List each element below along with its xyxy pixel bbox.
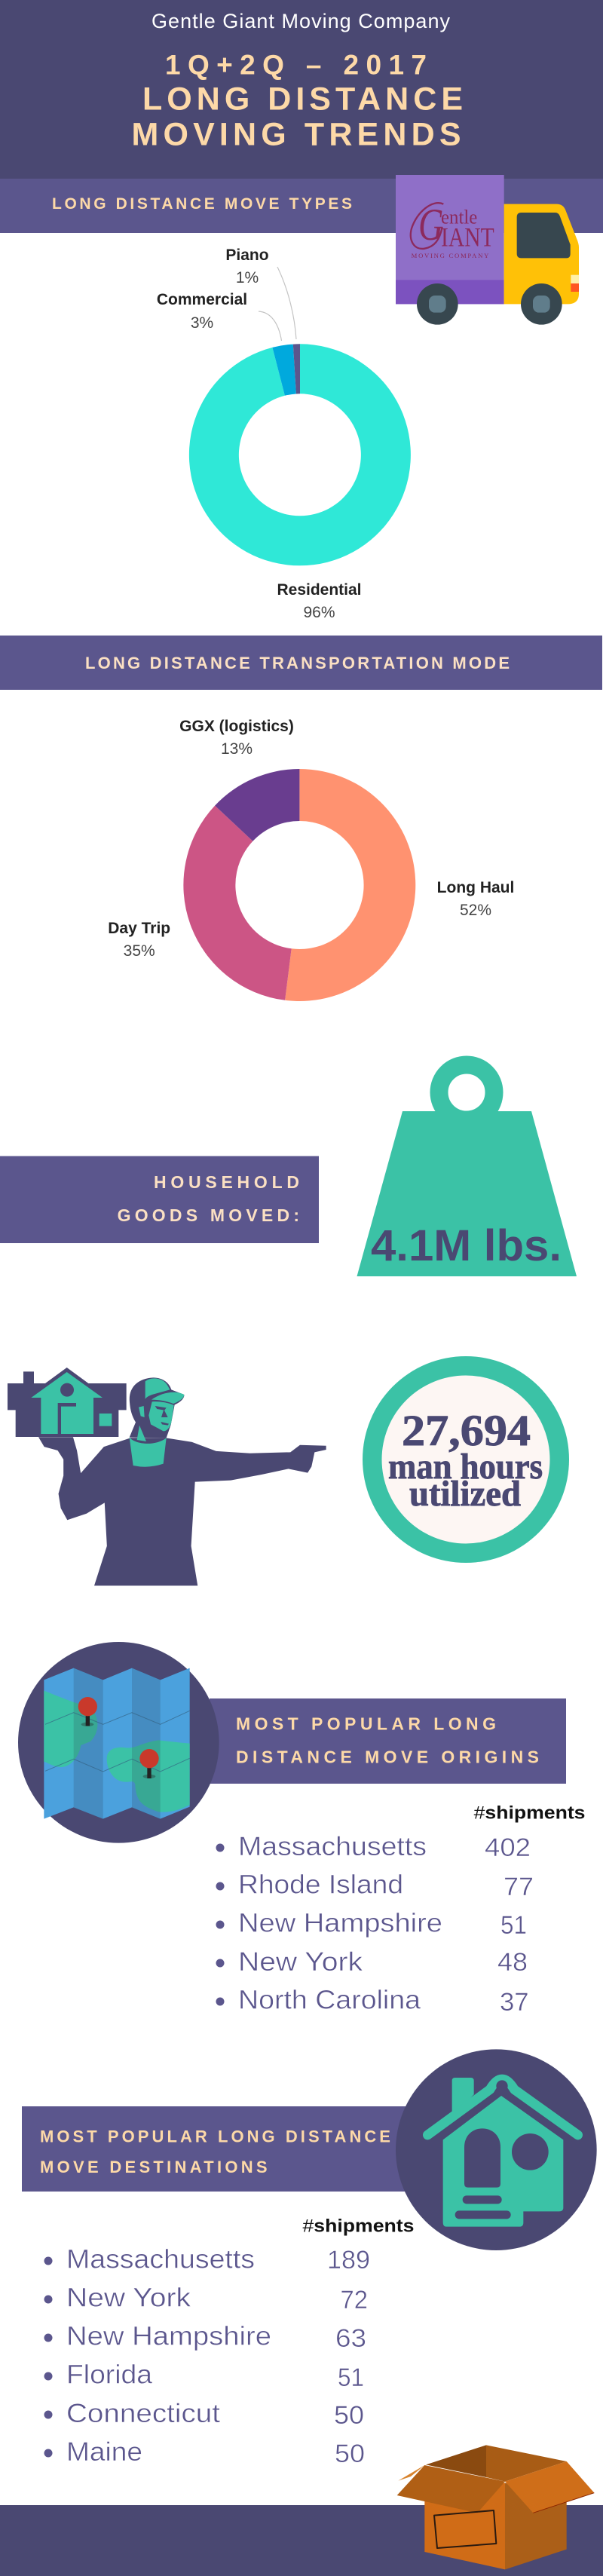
list: origins: 77 <box>504 1873 534 1901</box>
heading: household goods: GOODS MOVED: <box>118 1205 299 1225</box>
list: destinations: New York <box>66 2283 191 2313</box>
section band: long distance move types <box>0 179 603 233</box>
donut chart: move types <box>189 344 411 565</box>
list: destinations: 50 <box>334 2401 364 2430</box>
logo text: G <box>418 200 443 250</box>
heading text: origins <box>236 1714 539 1767</box>
icon: house in circle <box>396 2049 597 2250</box>
title: MOVING TRENDS <box>131 116 461 152</box>
icon: folded map <box>18 1642 219 1843</box>
label: long haul: Long Haul <box>437 879 514 896</box>
man upper details and house <box>8 1368 184 1467</box>
heading text: origins: MOST POPULAR LONG <box>236 1714 496 1734</box>
footer band <box>0 2505 603 2576</box>
house carried <box>8 1368 127 1437</box>
leader lines <box>259 267 296 341</box>
pin 2 <box>139 1749 159 1778</box>
title <box>131 50 463 152</box>
panel: origins heading <box>210 1698 566 1784</box>
heading: move types: LONG DISTANCE MOVE TYPES <box>52 195 352 213</box>
icon: weight with value <box>357 1064 577 1276</box>
title: 1Q+2Q – 2017 <box>165 50 427 80</box>
icon: open cardboard box <box>397 2445 594 2569</box>
list: destinations: 51 <box>338 2363 364 2392</box>
value: 27,694: 27,694 <box>402 1406 531 1455</box>
label: commercial: Commercial <box>157 291 247 308</box>
heading text: destinations: MOVE DESTINATIONS <box>40 2158 268 2176</box>
donut chart: transportation mode <box>183 769 415 1001</box>
heading: transportation mode: LONG DISTANCE TRANSPORTATION MODE <box>85 654 510 672</box>
caption: man hours utilized <box>388 1447 543 1514</box>
logo text: MOVING COMPANY <box>412 252 489 259</box>
list: origins: 48 <box>497 1948 528 1977</box>
section band: transportation mode <box>0 636 602 690</box>
column header: destinations shipments: #shipments <box>303 2216 415 2236</box>
panel: household goods moved <box>0 1156 319 1243</box>
logo swash <box>411 203 443 249</box>
head <box>130 1377 184 1467</box>
list: destinations: 63 <box>335 2324 366 2353</box>
list: destinations: 50 <box>335 2440 365 2468</box>
logo text: entle <box>441 206 477 228</box>
column header: origins shipments: #shipments <box>474 1803 585 1823</box>
label: GGX <box>179 718 294 758</box>
panel: destinations heading <box>22 2106 414 2192</box>
list: origins: New York <box>238 1947 363 1977</box>
logo text <box>412 200 494 259</box>
heading: household goods <box>118 1172 299 1225</box>
badge: man hours <box>363 1356 569 1563</box>
title: LONG DISTANCE <box>142 81 463 118</box>
label: day trip: Day Trip <box>108 920 170 937</box>
heading text: destinations <box>40 2127 390 2176</box>
list: origins: 51 <box>500 1911 527 1940</box>
logo text: IANT <box>441 222 494 253</box>
list: destinations: Massachusetts <box>66 2245 255 2274</box>
label: piano: Piano <box>225 247 269 264</box>
header panel <box>0 0 603 179</box>
label: residential <box>277 581 362 621</box>
label: day trip: 35% <box>124 942 155 960</box>
list: origins <box>216 1832 534 2017</box>
icon: moving truck with logo <box>396 175 579 325</box>
label: residential: 96% <box>303 604 335 621</box>
pin 1 <box>78 1697 97 1726</box>
list: origins: New Hampshire <box>238 1909 442 1937</box>
label: GGX: GGX (logistics) <box>179 718 294 735</box>
label: GGX: 13% <box>221 740 253 758</box>
label: commercial: 3% <box>191 314 213 332</box>
heading: household goods: HOUSEHOLD <box>154 1172 299 1192</box>
list: destinations: 189 <box>327 2246 370 2274</box>
label: commercial <box>157 291 247 332</box>
list: destinations: 72 <box>341 2286 368 2314</box>
list: origins: 37 <box>500 1988 529 2017</box>
list: destinations: New Hampshire <box>66 2322 271 2351</box>
caption: man hours utilized: man hours <box>388 1447 543 1487</box>
heading text: origins: DISTANCE MOVE ORIGINS <box>236 1747 539 1767</box>
list: destinations: Connecticut <box>66 2399 220 2428</box>
label: day trip <box>108 920 170 960</box>
value: 4.1M lbs: 4.1M lbs. <box>371 1221 562 1270</box>
label: residential: Residential <box>277 581 362 599</box>
illustration: mover carrying house <box>8 1368 326 1585</box>
company name: Gentle Giant Moving Company <box>152 10 451 32</box>
heading text: destinations: MOST POPULAR LONG DISTANCE <box>40 2127 390 2146</box>
list: origins: 402 <box>485 1833 531 1862</box>
caption: man hours utilized: utilized <box>409 1474 521 1514</box>
list: destinations: Florida <box>66 2360 153 2390</box>
list: origins: Massachusetts <box>238 1832 427 1861</box>
list: destinations: Maine <box>66 2437 142 2467</box>
list: destinations <box>44 2245 370 2468</box>
label: long haul <box>437 879 514 919</box>
man body <box>38 1437 326 1585</box>
list: origins: Rhode Island <box>238 1870 403 1900</box>
label: piano: 1% <box>236 269 259 286</box>
label: long haul: 52% <box>460 902 491 919</box>
list: origins: North Carolina <box>238 1986 421 2015</box>
label: piano <box>225 247 269 286</box>
